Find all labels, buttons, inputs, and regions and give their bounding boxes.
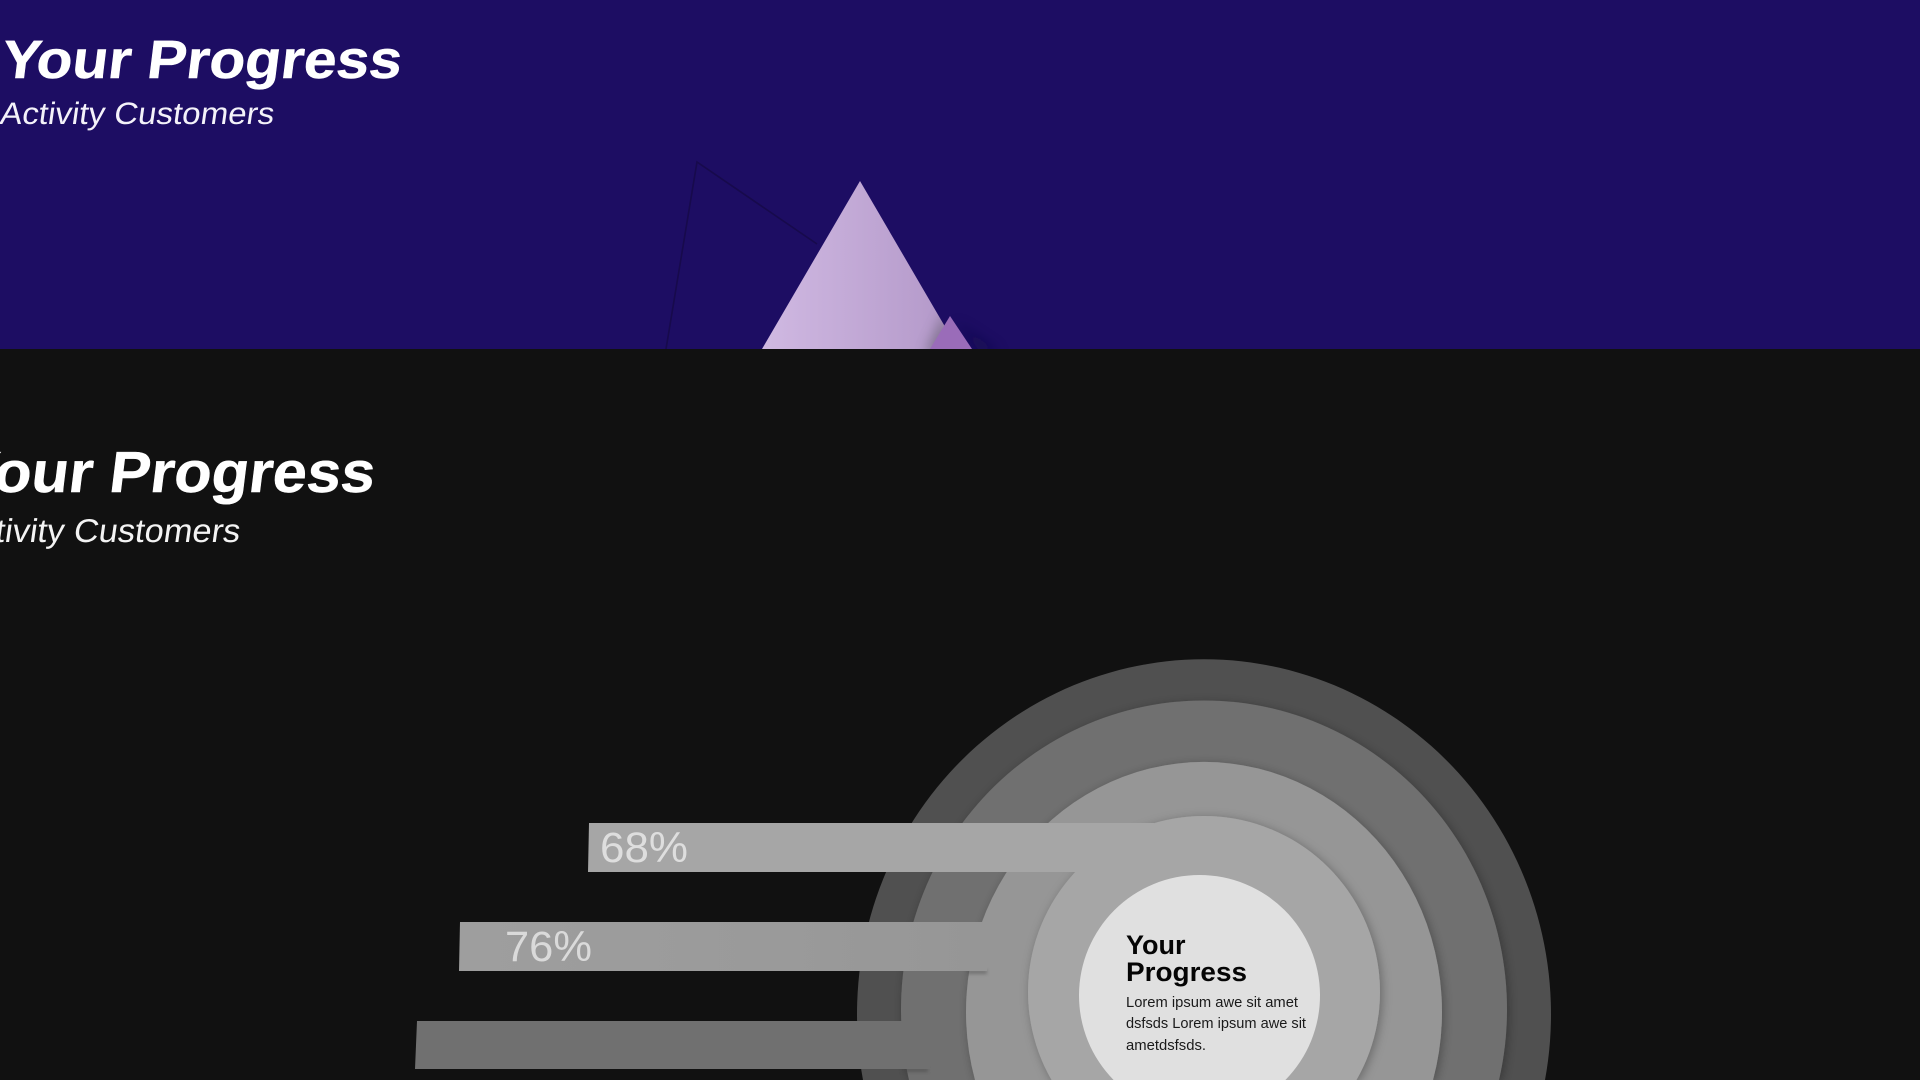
large lilac triangle (762, 181, 958, 349)
inner circle (1079, 875, 1320, 1080)
label 76%: 76% (505, 923, 592, 971)
circle body text (1126, 994, 1307, 1054)
small purple triangle (930, 316, 972, 349)
top heading: Your Progress (0, 30, 406, 90)
ring 2 (1028, 816, 1380, 1080)
panel: bottom dark slide (0, 349, 1920, 1080)
circle body text: Lorem ipsum awe sit amet (1126, 994, 1299, 1011)
circle title: Progress (1126, 957, 1247, 987)
circle title (1126, 930, 1247, 987)
triangle graphic (666, 162, 1000, 354)
label 68%: 68% (600, 824, 688, 872)
bar 1 (588, 823, 1154, 872)
ring 4 (901, 700, 1507, 1080)
outline triangle (666, 162, 817, 349)
circle title: Your (1126, 930, 1186, 960)
shadow on background (971, 336, 990, 349)
ring 3 (966, 762, 1442, 1080)
bar 2 (459, 922, 987, 974)
smudge on large triangle (922, 315, 944, 349)
ring 5 (857, 659, 1551, 1080)
top subheading: Activity Customers (0, 96, 277, 131)
bar 3 (415, 1021, 930, 1072)
circle body text: ametdsfsds. (1126, 1037, 1206, 1054)
circle body text: dsfsds Lorem ipsum awe sit (1126, 1015, 1307, 1032)
panel: top purple slide (0, 0, 1920, 354)
concentric ring chart (415, 659, 1551, 1080)
